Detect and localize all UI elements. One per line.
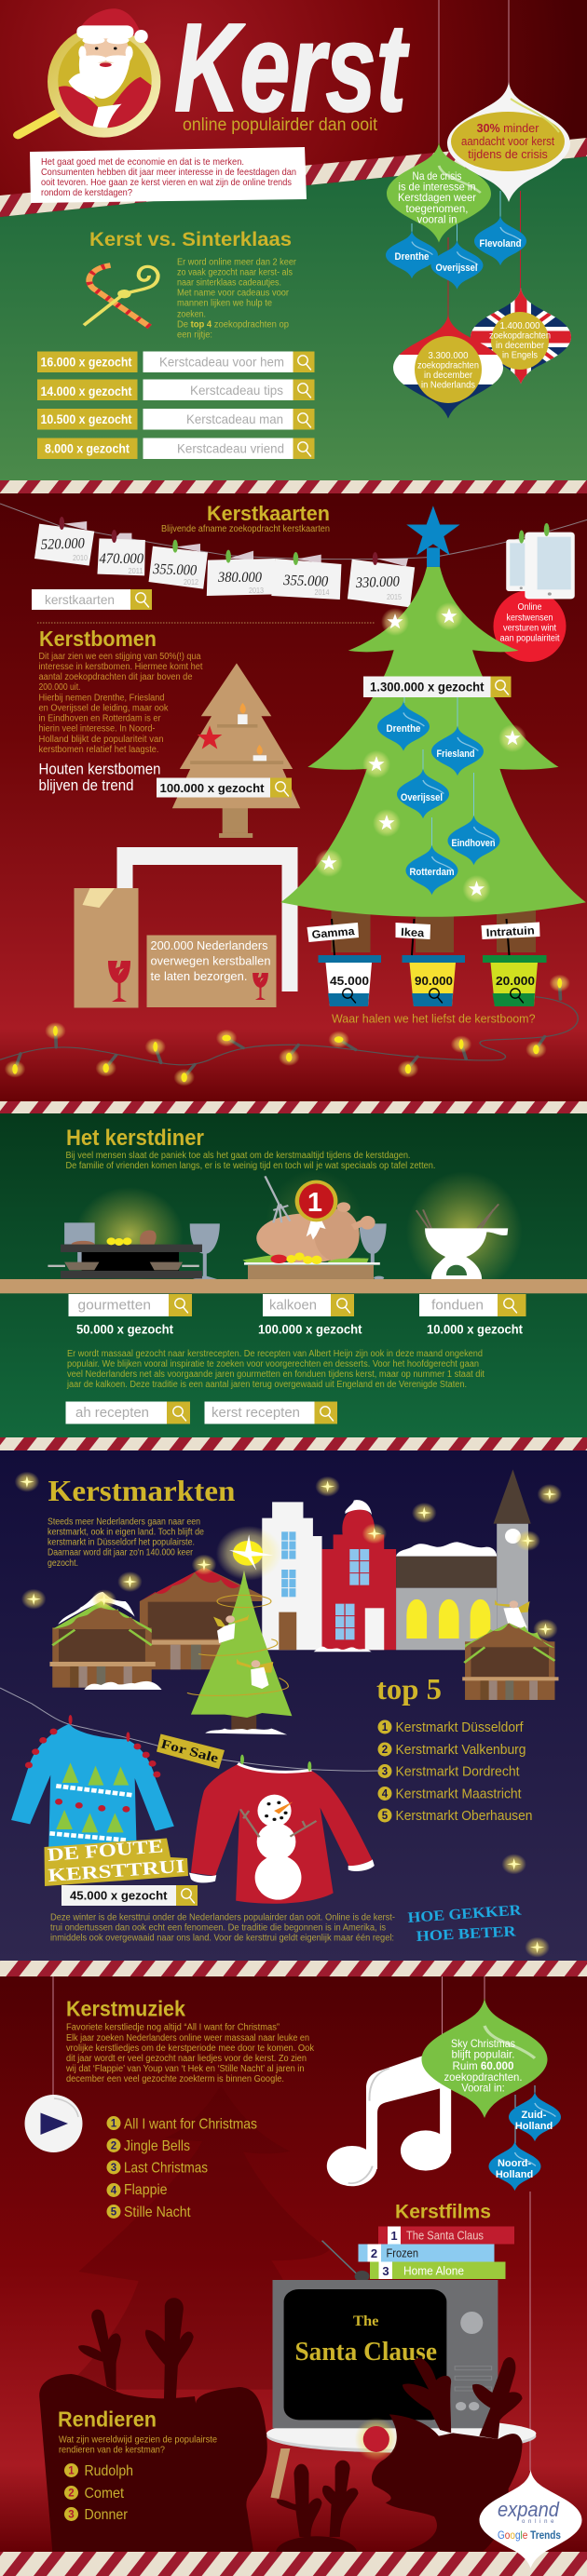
- card values: 355.000: [282, 573, 328, 590]
- text block: Elk jaar zoeken Nederlanders online weer massaal naar leuke en: [66, 2033, 309, 2043]
- blue sweater: [11, 1724, 174, 1850]
- text block: 200.000 uit.: [39, 682, 80, 693]
- card values: [41, 535, 400, 591]
- text block: gezocht.: [48, 1558, 78, 1569]
- tree trunks: [332, 908, 536, 952]
- text block: kerstmarkt in Düsseldorf het populairste.: [48, 1538, 195, 1547]
- text block: naar sinterklaas cadeautjes.: [177, 277, 281, 289]
- ornament: Dutch flag: in december: [424, 370, 472, 381]
- fondue pot: [416, 1204, 508, 1279]
- film 1: 1: [390, 2229, 398, 2243]
- text block: [48, 1517, 204, 1569]
- film 3: 3: [382, 2264, 389, 2278]
- intro text box: rondom de kerstdagen?: [41, 187, 132, 198]
- ornament: Drenthe: [377, 701, 430, 751]
- ornament: na de crisis: is de interesse in: [399, 181, 475, 194]
- stars: [501, 1854, 550, 1958]
- search box: 1.300.000: 1.300.000 x gezocht: [370, 680, 485, 695]
- text block: trui ondertussen dan ook echt een fenomeen. De traditie die begonnen is in Amerika, is: [50, 1923, 386, 1933]
- ornament: na de crisis: Kerstdagen weer: [398, 191, 476, 204]
- search row: man: 10.500 x gezocht: [41, 412, 132, 426]
- heading: kerstmuziek: Kerstmuziek: [66, 1996, 185, 2020]
- ornament: na de crisis: vooral in: [417, 212, 457, 225]
- back stall: [140, 1567, 262, 1669]
- string of lights: [0, 975, 578, 1086]
- ornament: Rotterdam: [406, 845, 458, 895]
- panel: header: [18, 0, 410, 203]
- ornament: zuid-holland: Zuid-: [522, 2110, 547, 2121]
- pot: Ikea: Ikea: [401, 925, 425, 939]
- red callout: online kerstwensen: versturen wint: [503, 624, 556, 633]
- subtitle: online populairder dan ooit: [183, 115, 378, 135]
- panel: kerstmarkten: [0, 1469, 562, 1958]
- text block: populair. We blijken vooral inspiratie te zoeken voor voorgerechten en desserts. Voor het hoofdgerecht gaan: [67, 1359, 479, 1369]
- pot: Gamma: 45.000: [330, 974, 369, 988]
- text block: en Overijssel de leiding, maar ook: [39, 704, 169, 713]
- ornament: UK flag: 1.400.000: [499, 320, 540, 331]
- search box: kalkoen: kalkoen: [269, 1298, 317, 1313]
- text block: zo vaak gezocht naar kerst- als: [177, 268, 293, 277]
- ornament: 30% minder: tijdens de crisis: [468, 148, 548, 161]
- search row: vriend: [37, 438, 315, 459]
- pot: Gamma: Gamma: [311, 924, 355, 941]
- film 1: [378, 2227, 514, 2244]
- ornament: Friesland: [431, 726, 484, 775]
- ornament strings: [412, 0, 520, 317]
- panel: het kerstdiner: [0, 1126, 587, 1424]
- red callout: online kerstwensen: [494, 590, 567, 662]
- banner: de foute kersttrui: KERSTTRUI: [48, 1856, 185, 1886]
- pot: Ikea: 90.000: [415, 974, 453, 988]
- ornament: noord-holland: [488, 2141, 540, 2191]
- gourmet set: [48, 1222, 220, 1279]
- text block: zoeken.: [177, 309, 206, 320]
- sweaters on a line: [0, 1688, 550, 1958]
- search box: 45.000: 45.000 x gezocht: [70, 1888, 168, 1903]
- heading: Het kerstdiner: [66, 1126, 204, 1151]
- top 5 list: 5: [382, 1811, 389, 1822]
- top 5 list: 4: [382, 1789, 389, 1801]
- panel: kerstbomen: [39, 627, 300, 1007]
- title: Kerst: [174, 0, 410, 138]
- front-left stall: [49, 1592, 162, 1690]
- search row: man: Kerstcadeau man: [186, 411, 283, 426]
- cardboard box: [75, 888, 138, 1007]
- card values: 380.000: [217, 570, 262, 586]
- song list: Jingle Bells: [124, 2138, 190, 2154]
- front-right stall: [462, 1623, 558, 1700]
- top 5 list: 3: [382, 1767, 388, 1778]
- text block: kerstbomen relatief het laagste.: [39, 745, 158, 755]
- ornament: logos: expand: [498, 2498, 560, 2521]
- top 5 list: 2: [382, 1745, 388, 1756]
- text block: Steeds meer Nederlanders gaan naar een: [48, 1517, 200, 1527]
- search row: tips: 14.000 x gezocht: [41, 384, 132, 398]
- reindeer list: Comet: [84, 2486, 125, 2502]
- song list: 1: [111, 2119, 117, 2130]
- pot: Ikea: [395, 919, 465, 1006]
- panel: kerstboom: [0, 506, 586, 1086]
- badge number: 1: [307, 1188, 322, 1218]
- search box: gourmetten: 50.000 x gezocht: [76, 1322, 173, 1337]
- intro text box: ooit tevoren. Hoe gaan ze kerst vieren en wat zijn de online trends: [41, 177, 292, 188]
- caption: Waar halen we het liefst de kerstboom?: [332, 1011, 535, 1026]
- ornament: na de crisis: [387, 142, 491, 243]
- search row: tips: [37, 380, 315, 400]
- green christmas tree: [280, 506, 586, 917]
- subheading: Blijvende afname zoekopdracht kerstkaarten: [161, 524, 330, 534]
- text block: inmiddels ook overgewaaid naar ons land. Voor de kersttrui geldt eigenlijk maar één regel:: [50, 1933, 394, 1944]
- angel 3: [495, 1599, 530, 1627]
- cardboard sign: 200.000: te laten bezorgen.: [151, 970, 248, 983]
- reindeer list: [64, 2463, 133, 2523]
- song list: 3: [111, 2163, 116, 2174]
- ornament: na de crisis: Na de crisis: [412, 169, 462, 182]
- search box: gourmetten: [69, 1294, 192, 1337]
- intro text: De familie of vrienden komen langs, er is te weinig tijd en toch wil je wat speciaals op tafel zetten.: [65, 1161, 436, 1171]
- song list: Last Christmas: [124, 2160, 208, 2177]
- ornament: Friesland: Friesland: [436, 749, 475, 760]
- pot: Gamma: [307, 919, 381, 1006]
- cardboard sign: 200.000: [147, 935, 276, 1007]
- song list: 4: [111, 2186, 117, 2197]
- ornament: sky christmas: Vooral in:: [461, 2082, 505, 2095]
- song list: All I want for Christmas: [124, 2117, 257, 2132]
- background tree silhouette: [63, 2085, 360, 2390]
- panel: kerstkaarten: [0, 502, 587, 623]
- search box: ah recepten: ah recepten: [75, 1405, 149, 1421]
- card years: 2012: [184, 577, 198, 587]
- text block: [50, 1912, 395, 1944]
- text block: Holland blijkt de populariteit van: [39, 735, 164, 745]
- ornament: sky christmas: zoekopdrachten.: [444, 2070, 522, 2084]
- ornament: Eindhoven: [447, 816, 499, 865]
- icon: candy cane and crosier: [84, 265, 158, 327]
- top 5 list: Kerstmarkt Valkenburg: [395, 1742, 526, 1758]
- sign: for sale: For Sale: [159, 1737, 220, 1766]
- ornament: 30% minder: 30% minder: [477, 122, 539, 135]
- search row: man: [37, 409, 315, 430]
- red callout: online kerstwensen: Online: [518, 602, 542, 613]
- cardboard sign: 200.000: 200.000 Nederlanders: [151, 939, 268, 952]
- search box: fonduen: 10.000 x gezocht: [427, 1322, 523, 1337]
- heading: top 5: top 5: [376, 1672, 442, 1706]
- ornament: Dutch flag: [393, 315, 503, 419]
- sign: for sale: [157, 1733, 225, 1769]
- ornament: 30% minder: aandacht voor kerst: [461, 135, 554, 148]
- ornament: UK flag: zoekopdrachten: [489, 330, 551, 341]
- text block: rendieren van de kerstman?: [59, 2445, 165, 2456]
- search row: voor hem: Kerstcadeau voor hem: [159, 354, 284, 369]
- search box: kerstkaarten: kerstkaarten: [45, 592, 115, 607]
- text block: een rijtje:: [177, 330, 212, 341]
- top 5 list: [378, 1720, 533, 1824]
- card values: 330.000: [355, 573, 400, 591]
- ornament: Overijssel: [397, 769, 449, 818]
- search box: kerstkaarten: [32, 589, 152, 610]
- ornament: noord-holland: Noord-: [498, 2158, 531, 2169]
- red house: [322, 1500, 396, 1650]
- tagline: HOE BETER: [416, 1923, 517, 1945]
- ornament: Overijssel: [430, 240, 483, 290]
- heading: Kerst vs. Sinterklaas: [89, 229, 292, 250]
- illustration: dinner table: [0, 1170, 587, 1293]
- text: houten kerstbomen: Houten kerstbomen: [39, 762, 160, 778]
- pot: Intratuin: Intratuin: [485, 924, 535, 939]
- text block: dit jaar wordt er veel gezocht naar liedjes voor de kerst. Zo zien: [66, 2054, 307, 2064]
- search box: 45.000: [61, 1885, 198, 1906]
- icon: music note: [327, 2055, 451, 2186]
- card values: 470.000: [99, 551, 143, 567]
- screen text: [294, 2313, 437, 2367]
- ornament: logos: online: [522, 2519, 554, 2525]
- heading: Kerstkaarten: [207, 502, 330, 525]
- text block: Daarnaar word dit jaar zo'n 140.000 keer: [48, 1547, 194, 1558]
- icon: santa in magnifying glass: [18, 8, 160, 138]
- pot: Intratuin: 20.000: [496, 974, 535, 988]
- ornament: sky christmas: Sky Christmas: [451, 2037, 515, 2050]
- red callout: online kerstwensen: aan populairiteit: [499, 633, 560, 644]
- intro text box: Het gaat goed met de economie en dat is te merken.: [41, 156, 244, 168]
- text block: wij dat ‘Flappie’ van Youp van ‘t Hek en ‘Stille Nacht’ al jaren in: [65, 2064, 304, 2074]
- text: houten kerstbomen: blijven de trend: [39, 777, 134, 794]
- text block: Hierbij nemen Drenthe, Friesland: [39, 693, 164, 704]
- market tree: [187, 1526, 292, 1734]
- card values: 520.000: [41, 535, 85, 553]
- ornament: na de crisis: toegenomen,: [406, 202, 468, 215]
- pot: Intratuin: [481, 919, 546, 1006]
- search box: kerst recepten: [205, 1402, 337, 1424]
- song list: Flappie: [124, 2182, 168, 2198]
- intro text box: [30, 147, 307, 203]
- card values: 355.000: [152, 561, 197, 579]
- reindeer list: 2: [68, 2488, 75, 2499]
- text block: Favoriete kerstliedje nog altijd “All I want for Christmas”: [66, 2022, 280, 2033]
- film 3: [370, 2262, 505, 2279]
- turkey: [242, 1176, 387, 1280]
- card years: 2011: [129, 566, 143, 575]
- card years: 2014: [315, 587, 330, 597]
- panel: kerstmuziek en kerstfilms: [0, 1976, 587, 2576]
- card years: 2013: [249, 586, 264, 595]
- ornament: 30% minder: [447, 82, 570, 202]
- icon: play button: [24, 2095, 82, 2152]
- reindeer silhouettes: [39, 2298, 523, 2569]
- reindeer list: Rudolph: [84, 2463, 133, 2479]
- reindeer list: 1: [68, 2465, 75, 2476]
- text block: vrolijke kerstliedjes om de kerstperiode mee door te komen. Ook: [66, 2043, 315, 2054]
- intro text: [65, 1151, 436, 1171]
- search row: tips: Kerstcadeau tips: [190, 383, 283, 398]
- bottom stripe: [0, 2552, 587, 2576]
- ornament: zuid-holland: Holland: [515, 2121, 553, 2132]
- banner: de foute kersttrui: [45, 1836, 188, 1886]
- top 5 list: Kerstmarkt Düsseldorf: [395, 1720, 524, 1735]
- ornament: Dutch flag: in Nederlands: [421, 380, 475, 391]
- text block: mannen lijken we hulp te: [177, 298, 272, 309]
- song list: Stille Nacht: [124, 2205, 191, 2220]
- search row: vriend: 8.000 x gezocht: [45, 441, 130, 456]
- song list: 2: [111, 2141, 116, 2152]
- tagline: HOE GEKKER: [407, 1902, 522, 1926]
- tree lights: [315, 602, 526, 903]
- text block: Wat zijn wereldwijd gezien de populairste: [59, 2435, 217, 2445]
- search row: voor hem: 16.000 x gezocht: [41, 356, 132, 369]
- song list: 5: [111, 2206, 117, 2218]
- film 2: [358, 2244, 494, 2262]
- search box: fonduen: [419, 1294, 526, 1337]
- search box: kalkoen: 100.000 x gezocht: [258, 1322, 362, 1337]
- cardboard sign: 200.000: overwegen kerstballen: [151, 955, 271, 968]
- ornament: Drenthe: Drenthe: [395, 251, 429, 263]
- search box: 100.000: [157, 778, 292, 797]
- text block: Er word online meer dan 2 keer: [177, 257, 297, 268]
- white stand: [117, 847, 298, 991]
- ornament: UK flag: [471, 289, 571, 384]
- intro text: Bij veel mensen slaat de paniek toe als het gaat om de kerstmaaltijd tijdens de kerstdagen.: [65, 1151, 410, 1161]
- reindeer list: Donner: [84, 2507, 129, 2523]
- ornament: Overijssel: Overijssel: [401, 792, 443, 803]
- search box: kerst recepten: kerst recepten: [212, 1405, 300, 1421]
- text block: kerstmarkt, ook in eigen land. Toch blijft de: [48, 1527, 204, 1538]
- card years: [73, 553, 402, 601]
- tagline: [407, 1902, 522, 1945]
- search row: vriend: Kerstcadeau vriend: [177, 441, 284, 456]
- ornament: Drenthe: [386, 231, 438, 278]
- screen text: The: [353, 2313, 378, 2329]
- heading: Kerstmarkten: [48, 1474, 236, 1507]
- screen text: Santa Clause: [294, 2338, 437, 2367]
- ornament: zuid-holland: [509, 2091, 561, 2141]
- text block: [177, 257, 297, 341]
- search box: fonduen: fonduen: [431, 1298, 484, 1313]
- text block: veel Nederlanders net als voorgaande jaren gourmetten en fonduen tijdens kerst, maar op nummer 1 staat dit: [67, 1369, 485, 1380]
- text block: De top 4 zoekopdrachten op: [177, 320, 289, 330]
- text: houten kerstbomen: [39, 762, 160, 794]
- ornament: noord-holland: Holland: [496, 2169, 533, 2180]
- illustration: christmas market: [15, 1469, 562, 1734]
- banner: de foute kersttrui: DE FOUTE: [47, 1836, 164, 1866]
- ornament: sky christmas: [421, 1998, 548, 2144]
- text block: jaar de kalkoen. Deze traditie is een aantal jaren terug overgewaaid uit Engeland en de Verenigde Staten.: [66, 1380, 467, 1390]
- clothesline with cards: [0, 504, 587, 607]
- reindeer list: 3: [68, 2510, 75, 2521]
- film 3: Home Alone: [403, 2264, 464, 2277]
- ornament: logos: [479, 2470, 581, 2568]
- ornament: Overijssel: Overijssel: [436, 263, 477, 274]
- card years: 2015: [387, 592, 402, 601]
- white house: [262, 1502, 322, 1650]
- ornament: sky christmas: Ruim 60.000: [453, 2059, 514, 2072]
- red sweater: [189, 1763, 375, 1904]
- text block: Er wordt massaal gezocht naar kerstrecepten. De recepten van Albert Heijn zijn ook in deze maand ongekend: [67, 1349, 483, 1359]
- top 5 list: Kerstmarkt Oberhausen: [395, 1808, 533, 1824]
- search box: 1.300.000: [363, 676, 511, 697]
- heading: kerstfilms: Kerstfilms: [395, 2201, 491, 2223]
- film 2: Frozen: [386, 2247, 418, 2260]
- text block: december een veel gezochte zoekterm is binnen Google.: [66, 2074, 284, 2084]
- heading: rendieren: Rendieren: [58, 2407, 157, 2432]
- panel: kerst vs sinterklaas: [37, 0, 578, 459]
- text block: [65, 2022, 315, 2084]
- text block: Met name voor cadeaus voor: [177, 289, 290, 298]
- church: [396, 1469, 531, 1650]
- stars: [15, 1472, 562, 1639]
- red callout: online kerstwensen: kerstwensen: [507, 613, 553, 624]
- text block: [59, 2435, 217, 2456]
- text block: Deze winter is de kersttrui onder de Nederlanders populairder dan ooit. Online is de kerst-: [50, 1912, 395, 1923]
- text block: Dit jaar zien we een stijging van 50%(!) qua: [39, 652, 201, 662]
- text block: hierin veel interesse. In Noord-: [39, 724, 155, 734]
- film 2: 2: [371, 2246, 377, 2260]
- ornament: Drenthe: Drenthe: [386, 723, 421, 735]
- ornament: UK flag: in Engels: [502, 350, 538, 361]
- text block: aantal zoekopdrachten dit jaar boven de: [39, 672, 193, 682]
- ornament: logos: Google Trends: [498, 2529, 561, 2542]
- top 5 list: Kerstmarkt Maastricht: [395, 1786, 522, 1802]
- television on table: [266, 2241, 536, 2499]
- ornament: Flevoland: Flevoland: [479, 238, 522, 250]
- search box: ah recepten: [65, 1402, 190, 1424]
- ornament: UK flag: in december: [496, 340, 544, 351]
- text block: [39, 652, 203, 755]
- card years: 2010: [73, 553, 88, 562]
- search box: kalkoen: [258, 1294, 362, 1337]
- angel 1: [213, 1614, 249, 1643]
- top 5 list: Kerstmarkt Dordrecht: [395, 1763, 520, 1780]
- ornament: Dutch flag: 3.300.000: [429, 350, 469, 361]
- search box: gourmetten: gourmetten: [78, 1298, 151, 1313]
- film 1: The Santa Claus: [406, 2229, 484, 2242]
- ornament: Flevoland: [474, 216, 526, 265]
- top 5 list: 1: [382, 1722, 389, 1733]
- intro text box: Consumenten hebben dit jaar meer interesse in de feestdagen dan: [41, 167, 296, 178]
- ornament: sky christmas: blijft populair.: [451, 2048, 514, 2061]
- ornament: Dutch flag: zoekopdrachten: [417, 359, 479, 371]
- search box: 100.000: 100.000 x gezocht: [160, 781, 265, 795]
- tablets: [506, 523, 575, 599]
- ornament: Eindhoven: Eindhoven: [451, 838, 496, 849]
- song list: [106, 2116, 257, 2220]
- red nose: [355, 2418, 398, 2461]
- heading: Kerstbomen: [39, 627, 157, 651]
- text block: [66, 1349, 485, 1390]
- search row: voor hem: [37, 352, 315, 372]
- text block: interesse in kerstbomen. Hiermee komt het: [39, 662, 203, 672]
- ornament: Rotterdam: Rotterdam: [410, 867, 455, 878]
- text block: in Eindhoven en Rotterdam is er: [39, 713, 161, 724]
- wooden tree: [172, 663, 300, 838]
- angel 2: [237, 1659, 273, 1689]
